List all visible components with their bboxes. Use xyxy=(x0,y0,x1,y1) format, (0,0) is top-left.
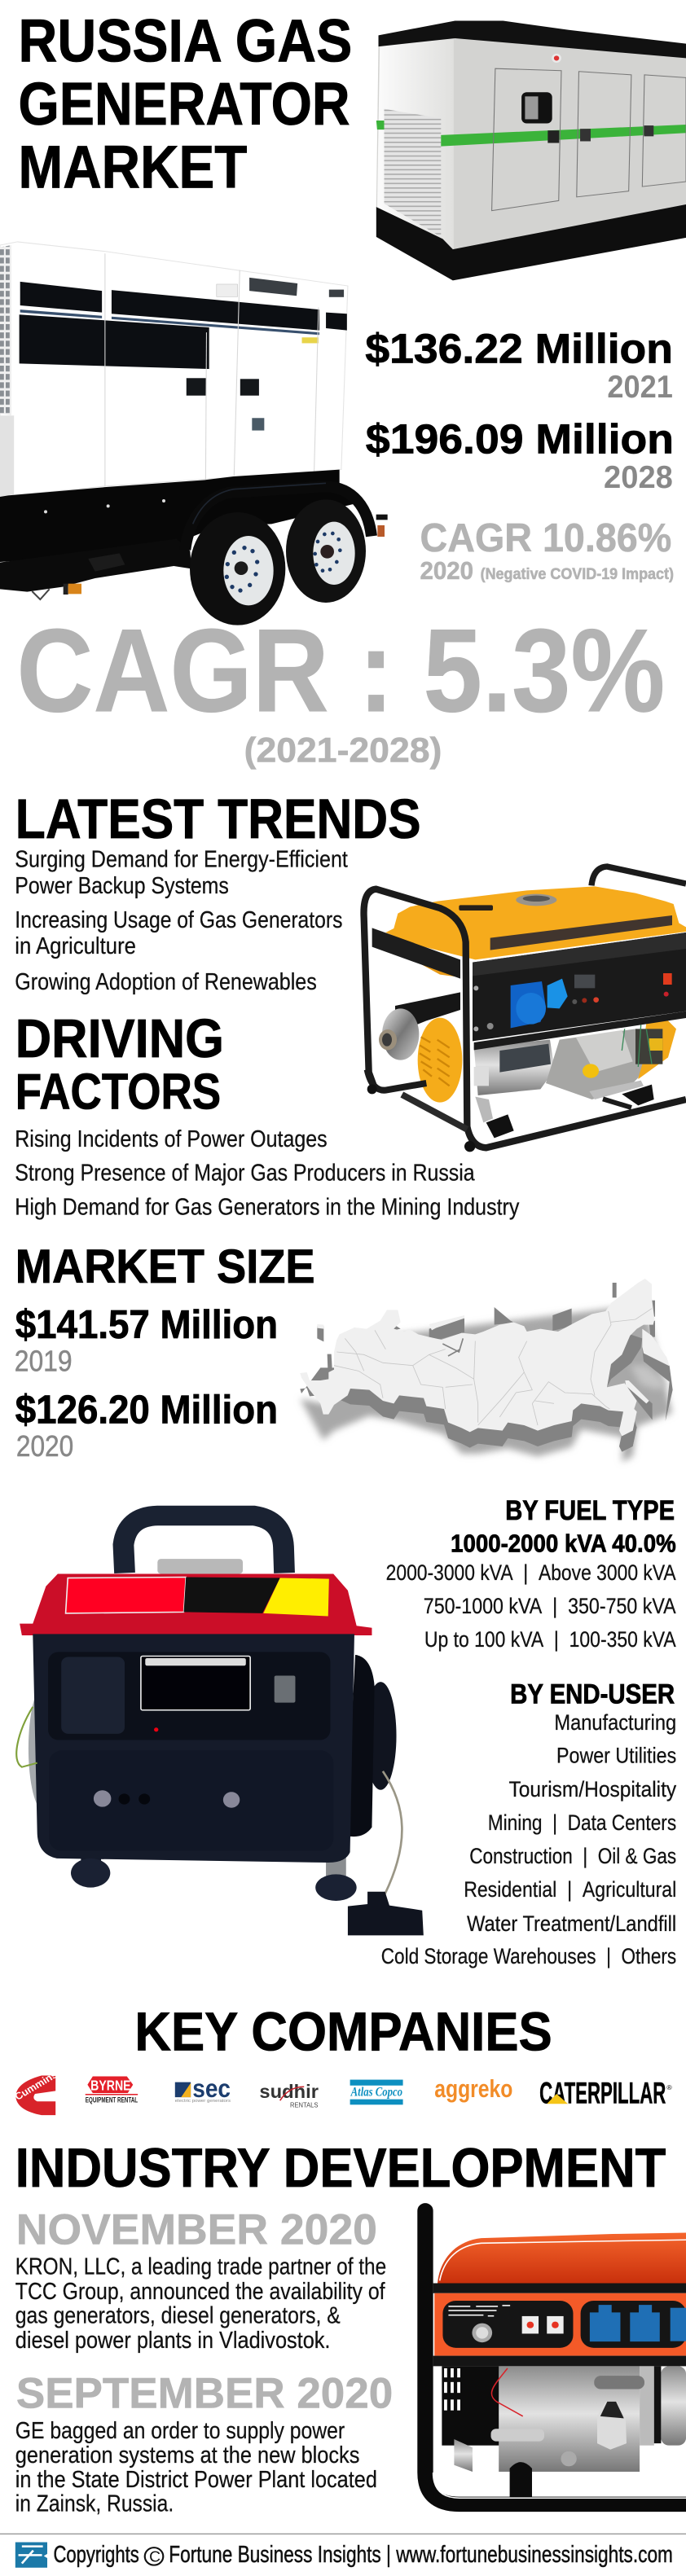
copyright text: C xyxy=(149,2549,161,2565)
logo: SEC: sec xyxy=(192,2074,231,2103)
text block: September 2020: SEPTEMBER 2020 xyxy=(16,2370,393,2417)
text block: by fuel type xyxy=(386,1494,676,1652)
text block: September 2020: GE bagged an order to supply power xyxy=(15,2418,345,2444)
text block: November 2020: TCC Group, announced the availability of xyxy=(15,2279,385,2305)
text block: driving factors list: Strong Presence of Major Gas Producers in Russia xyxy=(15,1160,475,1186)
stat: market size 2020: $126.20 Million xyxy=(15,1387,278,1432)
stat: market value 2021: 2021 xyxy=(607,370,673,405)
map: Russia xyxy=(300,1279,673,1462)
stat: market size 2019: 2019 xyxy=(15,1345,73,1377)
logo: SEC: electric power generators xyxy=(175,2099,231,2104)
stat: market value 2021 xyxy=(365,327,673,405)
text block: trends list: Power Backup Systems xyxy=(15,873,229,899)
stat: market size 2019: $141.57 Million xyxy=(15,1301,278,1347)
stat: market value 2021: $136.22 Million xyxy=(365,327,673,372)
copyright text: Copyrights xyxy=(54,2542,139,2568)
heading: latest trends: LATEST TRENDS xyxy=(15,788,421,850)
image: yellow portable generator xyxy=(364,867,686,1152)
logo: Aggreko: aggreko xyxy=(434,2075,512,2103)
title: RUSSIA GAS xyxy=(19,7,352,75)
logo: Sudhir Rentals: sudhir xyxy=(259,2082,319,2103)
image: orange generator illustration xyxy=(425,2210,686,2504)
text block: September 2020: in the State District Power Plant located xyxy=(15,2467,377,2493)
logo: Atlas Copco: Atlas Copco xyxy=(350,2085,402,2099)
title xyxy=(19,7,352,201)
heading: driving factors: DRIVING xyxy=(15,1007,224,1069)
text block: November 2020 xyxy=(15,2205,386,2354)
logo: Byrne Equipment Rental: EQUIPMENT RENTAL xyxy=(86,2096,138,2105)
stat: market value 2028: 2028 xyxy=(604,460,673,495)
text block: driving factors list: High Demand for Gas Generators in the Mining Industry xyxy=(15,1194,520,1221)
text block: November 2020: KRON, LLC, a leading trade partner of the xyxy=(15,2253,386,2280)
stat: market size 2019 xyxy=(15,1301,278,1377)
text block: November 2020: diesel power plants in Vladivostok. xyxy=(15,2327,330,2354)
logo: Caterpillar: ® xyxy=(666,2083,673,2091)
logo: Atlas Copco xyxy=(350,2080,403,2104)
big stat: CAGR 5.3%: (2021-2028) xyxy=(244,731,442,770)
text block: trends list: in Agriculture xyxy=(15,933,136,959)
text block: trends list: Growing Adoption of Renewables xyxy=(15,969,317,995)
logo: Sudhir Rentals: RENTALS xyxy=(290,2101,319,2109)
heading: driving factors: FACTORS xyxy=(15,1063,221,1120)
text block: November 2020: NOVEMBER 2020 xyxy=(16,2205,377,2253)
logo: Byrne Equipment Rental xyxy=(86,2076,138,2105)
heading: key companies: KEY COMPANIES xyxy=(134,2002,552,2062)
stat: market value 2028 xyxy=(366,417,674,495)
text block: September 2020: in Zainsk, Russia. xyxy=(15,2490,174,2517)
text block: by end-user xyxy=(381,1678,677,1968)
text block: September 2020 xyxy=(15,2370,393,2517)
text block: trends list: Surging Demand for Energy-Efficient xyxy=(15,846,348,873)
image: red and black small generator xyxy=(16,1516,424,1935)
stat: market size 2020 xyxy=(15,1387,278,1463)
stat: CAGR 2020: 2020 xyxy=(420,557,473,585)
text block: November 2020: gas generators, diesel generators, & xyxy=(15,2302,341,2328)
logo: SEC xyxy=(175,2074,231,2104)
logo: Fortune Business Insights xyxy=(15,2542,47,2568)
title: GENERATOR xyxy=(19,71,350,138)
heading: market size: MARKET SIZE xyxy=(15,1239,315,1293)
stat: market value 2028: $196.09 Million xyxy=(366,417,674,463)
heading: driving factors xyxy=(15,1007,224,1120)
stat: market size 2020: 2020 xyxy=(16,1430,73,1463)
text block: driving factors list: Rising Incidents of Power Outages xyxy=(15,1126,328,1152)
text block: driving factors list xyxy=(15,1126,520,1221)
image: enclosed grey generator xyxy=(376,21,686,280)
footer xyxy=(0,2534,686,2568)
text block: trends list: Increasing Usage of Gas Generators xyxy=(15,907,342,933)
text block: September 2020: generation systems at the new blocks xyxy=(15,2442,359,2468)
title: MARKET xyxy=(19,134,247,201)
stat: CAGR 2020 xyxy=(420,515,674,585)
text block: trends list xyxy=(15,846,348,995)
logo: Cummins: Cummins xyxy=(13,2069,59,2103)
image: white trailer generator xyxy=(0,242,388,625)
logo: Byrne Equipment Rental: BYRNE xyxy=(90,2078,131,2093)
